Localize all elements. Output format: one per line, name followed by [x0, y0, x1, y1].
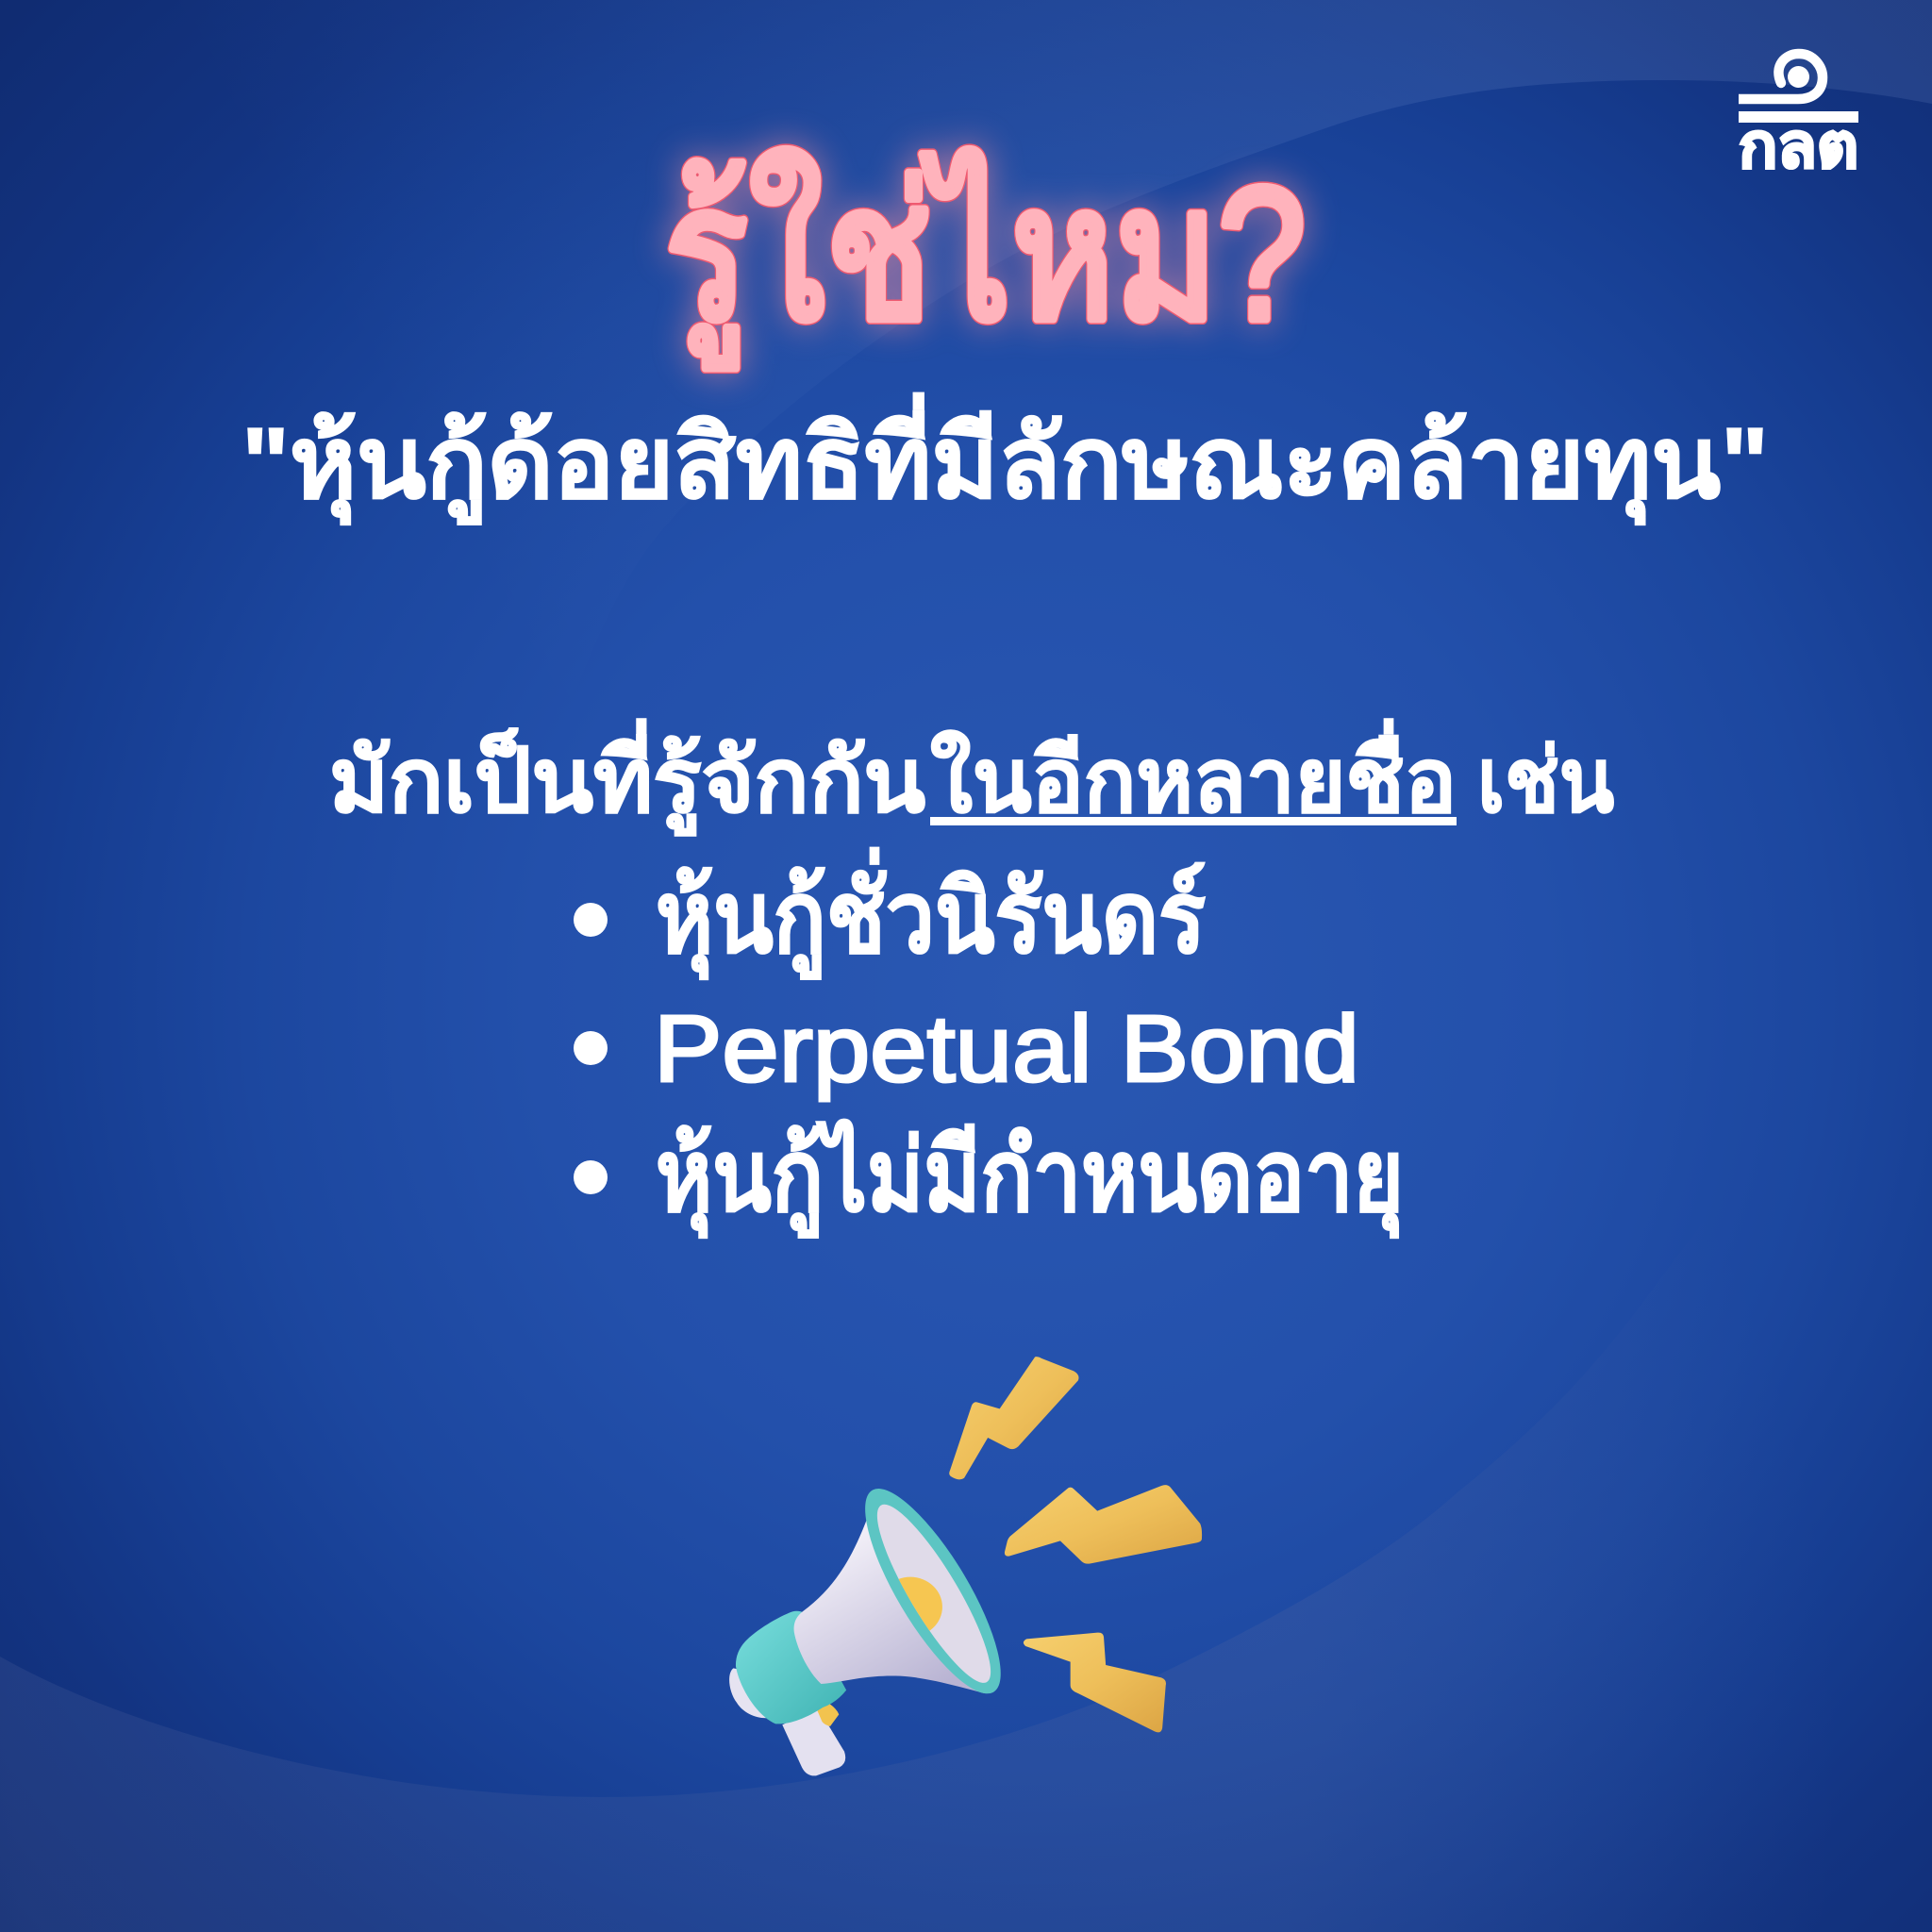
- title: รู้ใช่ไหม?: [664, 149, 1306, 368]
- title: รู้ใช่ไหม?: [664, 149, 1306, 368]
- megaphone back cap: [729, 1668, 773, 1718]
- megaphone illustration: [729, 1357, 1202, 1775]
- subtitle: "หุ้นกู้ด้อยสิทธิที่มีลักษณะคล้ายทุน": [242, 392, 1769, 525]
- title glow: รู้ใช่ไหม?: [664, 149, 1306, 368]
- horn: [794, 1516, 985, 1693]
- intro line: เช่น: [1477, 731, 1614, 830]
- bullet list: [574, 847, 1404, 1239]
- lightning bolt bottom: [1024, 1633, 1166, 1732]
- logo wordmark: กลต: [1739, 110, 1858, 180]
- teal body: [736, 1611, 846, 1724]
- intro line: ในอีกหลายชื่อ: [930, 718, 1457, 830]
- trigger: [817, 1704, 839, 1726]
- bullet item 3: หุ้นกู้ไม่มีกำหนดอายุ: [656, 1119, 1404, 1239]
- intro line: [329, 718, 1614, 837]
- logo: SEC Thailand: [1739, 54, 1858, 180]
- rim: [841, 1474, 1024, 1708]
- bullet item 1: [574, 847, 1206, 980]
- bullet item 1: หุ้นกู้ชั่วนิรันดร์: [656, 847, 1206, 980]
- lightning bolt top: [949, 1357, 1079, 1479]
- mouth: [860, 1494, 1008, 1693]
- speaker ball: [898, 1577, 942, 1631]
- bullet item 2: Perpetual Bond: [654, 996, 1359, 1102]
- lightning bolt middle: [1005, 1485, 1202, 1564]
- handle: [782, 1707, 845, 1775]
- intro line: มักเป็นที่รู้จักกัน: [329, 718, 925, 837]
